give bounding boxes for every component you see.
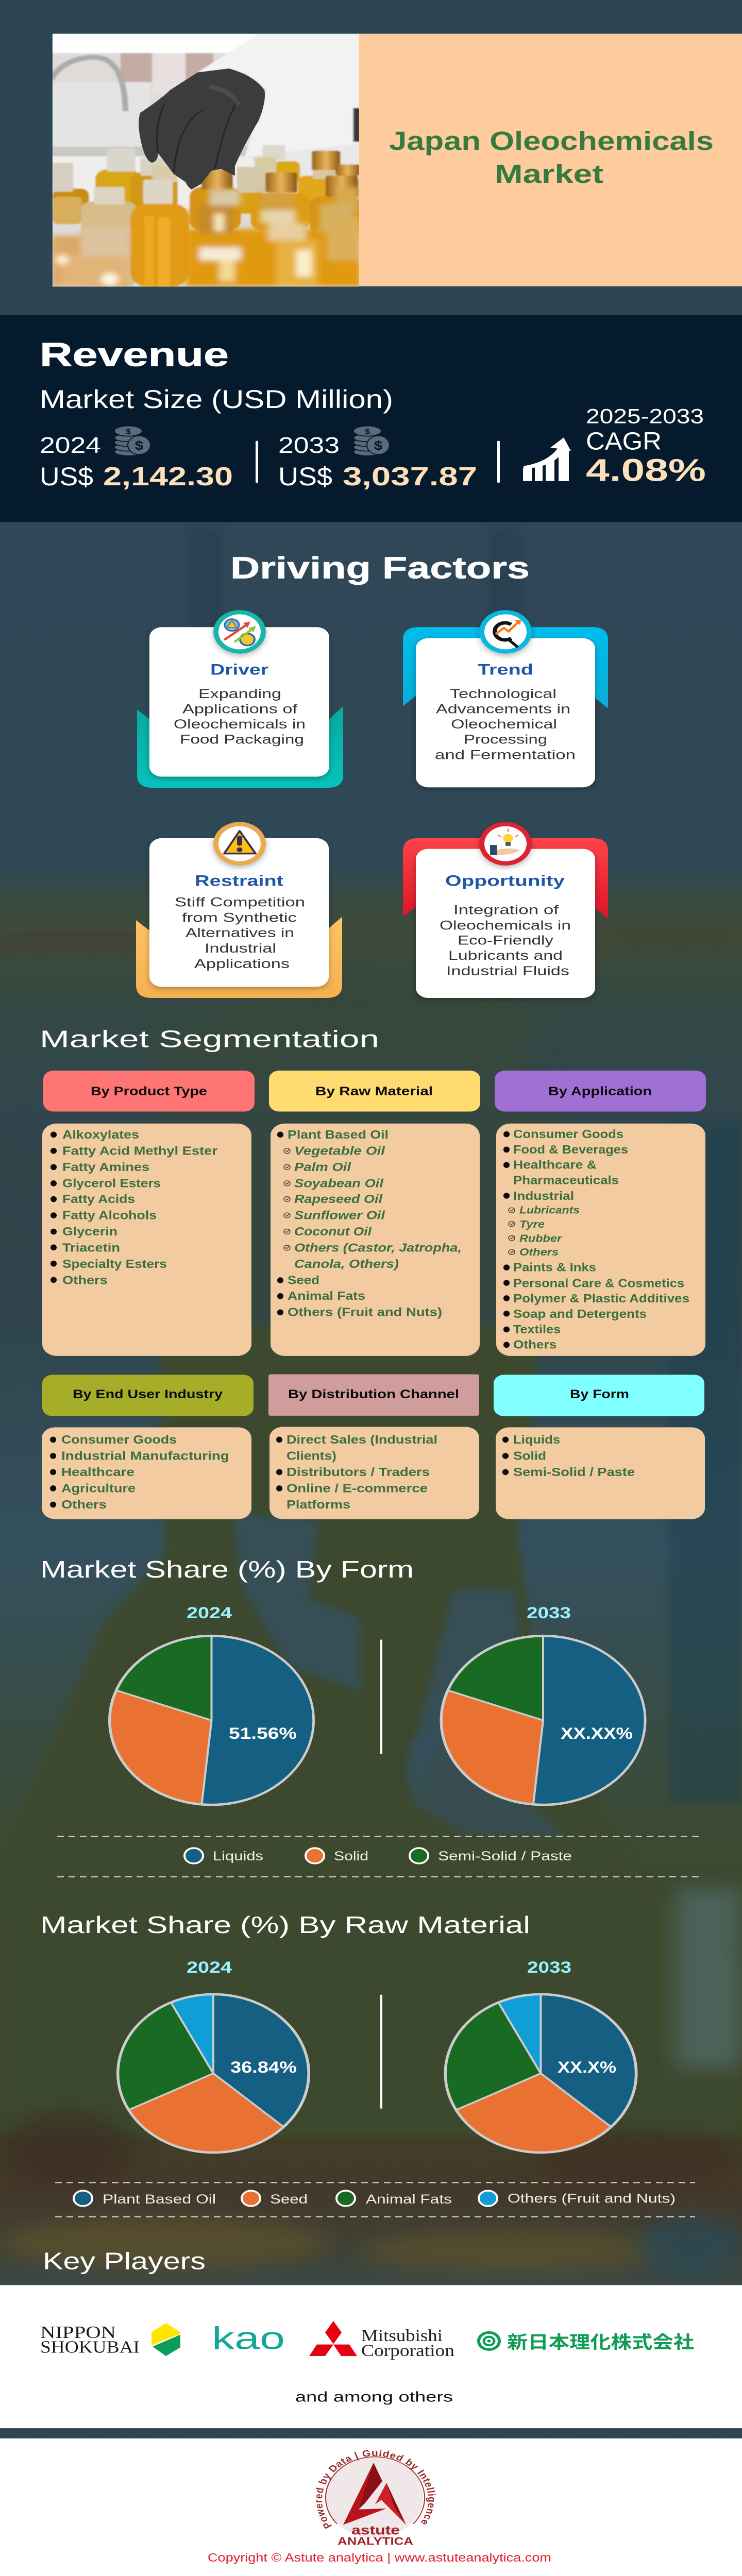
metric 2024: 2,142.30	[103, 462, 233, 492]
text: restraint body: Industrial	[205, 941, 276, 956]
list panel: product types: Fatty Acids	[62, 1193, 135, 1206]
metric 2033: US$	[278, 462, 332, 491]
icon: trend	[479, 610, 532, 654]
panel: by raw material	[269, 1071, 480, 1356]
text: restraint body	[175, 895, 305, 971]
legend: raw material: Seed	[270, 2192, 308, 2206]
text: driver body: Oleochemicals in	[174, 717, 306, 731]
list panel: applications: Food & Beverages	[513, 1143, 628, 1156]
logo: kao: kao	[212, 2321, 285, 2356]
revenue heading: Revenue	[40, 336, 229, 374]
logo: mitsubishi corporation: Corporation	[361, 2341, 454, 2360]
icon: coins 2033: $	[365, 427, 370, 436]
metric 2024: 2024	[40, 433, 101, 458]
text: driver body: Applications of	[182, 702, 297, 716]
text: trend body: Advancements in	[436, 702, 570, 716]
heading: market share by form: Market Share (%) By Form	[40, 1556, 414, 1583]
list panel: distribution channels: Online / E-commerce	[286, 1482, 428, 1495]
list panel: applications: Tyre	[519, 1218, 545, 1230]
heading: restraint: Restraint	[195, 873, 283, 890]
title panel	[359, 34, 742, 286]
list panel: raw materials: Canola, Others)	[294, 1258, 399, 1270]
list panel: applications: Consumer Goods	[513, 1128, 623, 1141]
list panel: product types: Fatty Alcohols	[62, 1209, 157, 1222]
footer	[0, 2438, 742, 2576]
year label 2033: 2033	[527, 1604, 571, 1622]
heading: by form: By Form	[570, 1387, 629, 1401]
list panel: applications: Others	[513, 1338, 556, 1351]
list panel: product types: Glycerol Esters	[62, 1177, 161, 1190]
logo: nippon shokubai: NIPPON	[40, 2323, 116, 2342]
list panel: applications: Pharmaceuticals	[513, 1174, 619, 1187]
list panel: end users	[42, 1427, 251, 1519]
icon: coins 2024: $	[126, 427, 131, 436]
panel: key players	[0, 2285, 742, 2428]
panel: trend	[403, 610, 608, 787]
panel: by form	[494, 1375, 705, 1519]
list panel: applications: Soap and Detergents	[513, 1308, 647, 1320]
heading: trend: Trend	[478, 661, 533, 679]
list panel: applications: Paints & Inks	[513, 1261, 596, 1274]
list panel: distribution channels: Direct Sales (Industrial	[286, 1433, 437, 1446]
title: Market	[495, 159, 603, 189]
pie chart: raw material 2024	[118, 1994, 309, 2152]
revenue band	[0, 315, 742, 522]
label: XX.X%	[558, 2058, 616, 2076]
list panel: applications: Industrial	[513, 1190, 574, 1203]
list panel: applications: Others	[519, 1246, 559, 1258]
title	[389, 126, 714, 189]
legend: form: Solid	[334, 1849, 368, 1863]
logo: mitsubishi corporation: Mitsubishi	[361, 2326, 443, 2345]
list panel: applications: Healthcare &	[513, 1159, 597, 1172]
metric 2024: US$	[40, 462, 93, 491]
heading: market segmentation: Market Segmentation	[40, 1025, 379, 1052]
market size label: Market Size (USD Million)	[40, 385, 393, 414]
logo: astute analytica: Powered by Data | Guided by Intelligence	[315, 2449, 436, 2529]
pie chart: raw material 2033	[446, 1994, 636, 2152]
heading: key players: Key Players	[43, 2247, 206, 2275]
list panel: raw materials: Vegetable Oil	[294, 1144, 385, 1158]
legend: form	[184, 1848, 572, 1863]
cagr block: 4.08%	[586, 453, 706, 488]
list panel: applications	[496, 1124, 705, 1356]
list panel: forms	[496, 1427, 705, 1519]
list panel: distribution channels: Platforms	[286, 1498, 350, 1511]
list panel: raw materials	[271, 1124, 480, 1356]
icon: growth chart	[523, 437, 571, 481]
list panel: raw materials: Others (Fruit and Nuts)	[288, 1306, 442, 1319]
legend: raw material: Plant Based Oil	[103, 2192, 216, 2206]
text: opportunity body: Lubricants and	[448, 948, 563, 963]
list panel: end users: Others	[61, 1498, 107, 1511]
list panel: raw materials: Soyabean Oil	[294, 1177, 384, 1190]
hero banner	[52, 34, 742, 286]
panel: restraint	[136, 822, 342, 998]
text: driver body: Expanding	[198, 686, 281, 701]
legend: raw material	[74, 2191, 676, 2206]
text: restraint body: Alternatives in	[185, 926, 294, 940]
heading: driving factors: Driving Factors	[230, 551, 530, 585]
cagr block: CAGR	[586, 428, 662, 455]
panel: by distribution channel	[268, 1374, 479, 1519]
icon: coins 2024: $	[135, 438, 143, 453]
rear bottles	[94, 168, 138, 203]
logo: new japan chemical: 新日本理化株式会社	[507, 2328, 694, 2353]
text: opportunity body: Industrial Fluids	[446, 963, 569, 978]
text: opportunity body: Oleochemicals in	[440, 918, 571, 933]
panel: by end user industry	[42, 1375, 254, 1519]
legend: form: Semi-Solid / Paste	[438, 1849, 572, 1863]
main bottle	[130, 203, 189, 286]
year label 2024: 2024	[187, 1958, 232, 1976]
text: opportunity body	[440, 903, 571, 978]
list panel: distribution channels: Clients)	[286, 1449, 336, 1463]
text: restraint body: Applications	[194, 956, 290, 971]
list panel: raw materials: Rapeseed Oil	[294, 1193, 383, 1206]
metric 2033	[278, 426, 477, 492]
icon: coins 2024	[114, 426, 150, 456]
icon: restraint	[213, 822, 266, 866]
heading: market share by raw material: Market Share (%) By Raw Material	[40, 1911, 530, 1938]
list panel: raw materials: Palm Oil	[294, 1161, 351, 1174]
list panel: forms: Liquids	[513, 1433, 560, 1446]
text: copyright: Copyright © Astute analytica | www.astuteanalytica.com	[208, 2551, 551, 2564]
list panel: forms: Semi-Solid / Paste	[513, 1466, 635, 1479]
legend: raw material: Others (Fruit and Nuts)	[508, 2191, 676, 2206]
text: driver body	[174, 686, 306, 747]
list panel: raw materials: Others (Castor, Jatropha,	[294, 1242, 462, 1255]
panel: driver	[137, 610, 343, 788]
text: trend body: and Fermentation	[435, 748, 576, 762]
heading: by distribution channel: By Distribution Channel	[288, 1387, 459, 1401]
pie chart: form 2024	[110, 1636, 313, 1804]
list panel: product types: Fatty Acid Methyl Ester	[62, 1144, 217, 1158]
list panel: raw materials: Seed	[288, 1274, 319, 1287]
list panel: raw materials: Plant Based Oil	[288, 1128, 389, 1141]
logo: mitsubishi corporation	[309, 2321, 454, 2360]
logo: astute analytica: ANALYTICA	[338, 2535, 413, 2548]
list panel: product types: Triacetin	[62, 1242, 120, 1255]
list panel: raw materials: Animal Fats	[288, 1290, 365, 1303]
list panel: distribution channels: Distributors / Traders	[286, 1466, 430, 1479]
icon: coins 2033: $	[374, 438, 382, 453]
list panel: product types	[42, 1124, 251, 1356]
text: trend body: Technological	[450, 686, 556, 701]
list panel: product types: Others	[62, 1274, 108, 1287]
year label 2024: 2024	[187, 1604, 232, 1622]
panel: opportunity	[403, 822, 608, 998]
list panel: applications: Lubricants	[519, 1204, 580, 1216]
icon: driver	[213, 610, 266, 654]
heading: by raw material: By Raw Material	[315, 1084, 433, 1098]
text: driver body: Food Packaging	[180, 732, 304, 747]
label: 51.56%	[229, 1724, 297, 1742]
text: restraint body: Stiff Competition	[175, 895, 305, 909]
legend: form: Liquids	[213, 1849, 263, 1863]
label: 36.84%	[230, 2058, 297, 2076]
text: trend body	[435, 686, 576, 762]
cagr block: 2025-2033	[586, 405, 704, 428]
metric 2033: 3,037.87	[343, 462, 477, 492]
metric 2033: 2033	[278, 433, 340, 458]
text: restraint body: from Synthetic	[182, 910, 297, 925]
list panel: raw materials: Sunflower Oil	[294, 1209, 385, 1222]
list panel: end users: Healthcare	[61, 1466, 134, 1479]
list panel: end users: Agriculture	[61, 1482, 136, 1495]
heading: by application: By Application	[548, 1084, 652, 1098]
text: trend body: Oleochemical	[451, 717, 557, 731]
cagr block	[586, 405, 706, 488]
text: opportunity body: Integration of	[453, 903, 559, 917]
logo: nippon shokubai: SHOKUBAI	[40, 2337, 140, 2357]
list panel: applications: Textiles	[513, 1323, 561, 1336]
text: and among others: and among others	[295, 2388, 453, 2405]
list panel: product types: Alkoxylates	[62, 1128, 139, 1141]
list panel: end users: Industrial Manufacturing	[61, 1449, 229, 1463]
list panel: raw materials: Coconut Oil	[294, 1225, 372, 1238]
heading: by product type: By Product Type	[91, 1084, 207, 1098]
year label 2033: 2033	[527, 1958, 571, 1976]
label: XX.XX%	[561, 1724, 633, 1742]
legend: raw material: Animal Fats	[366, 2192, 452, 2206]
list panel: applications: Personal Care & Cosmetics	[513, 1277, 684, 1290]
photo: gloved hand over oil bottles	[52, 34, 361, 286]
heading: driver: Driver	[210, 661, 268, 679]
list panel: product types: Specialty Esters	[62, 1258, 167, 1270]
list panel: forms: Solid	[513, 1449, 546, 1463]
metric 2024	[40, 426, 233, 492]
logo: nippon shokubai	[40, 2323, 180, 2357]
heading: by end user industry: By End User Industry	[73, 1387, 223, 1401]
logo: astute analytica: astute	[351, 2523, 400, 2537]
pie chart: form 2033	[442, 1636, 645, 1804]
list panel: product types: Glycerin	[62, 1225, 117, 1238]
text: opportunity body: Eco-Friendly	[458, 933, 553, 947]
title: Japan Oleochemicals	[389, 126, 714, 156]
list panel: distribution channels	[269, 1427, 479, 1519]
icon: coins 2033	[353, 426, 390, 456]
list panel: applications: Polymer & Plastic Additives	[513, 1292, 689, 1306]
heading: opportunity: Opportunity	[445, 873, 565, 890]
panel: by product type	[42, 1071, 255, 1356]
panel: by application	[495, 1071, 706, 1356]
text: trend body: Processing	[464, 732, 547, 747]
list panel: end users: Consumer Goods	[61, 1433, 177, 1446]
icon: opportunity	[479, 822, 532, 866]
list panel: product types: Fatty Amines	[62, 1161, 149, 1174]
list panel: applications: Rubber	[519, 1232, 562, 1244]
